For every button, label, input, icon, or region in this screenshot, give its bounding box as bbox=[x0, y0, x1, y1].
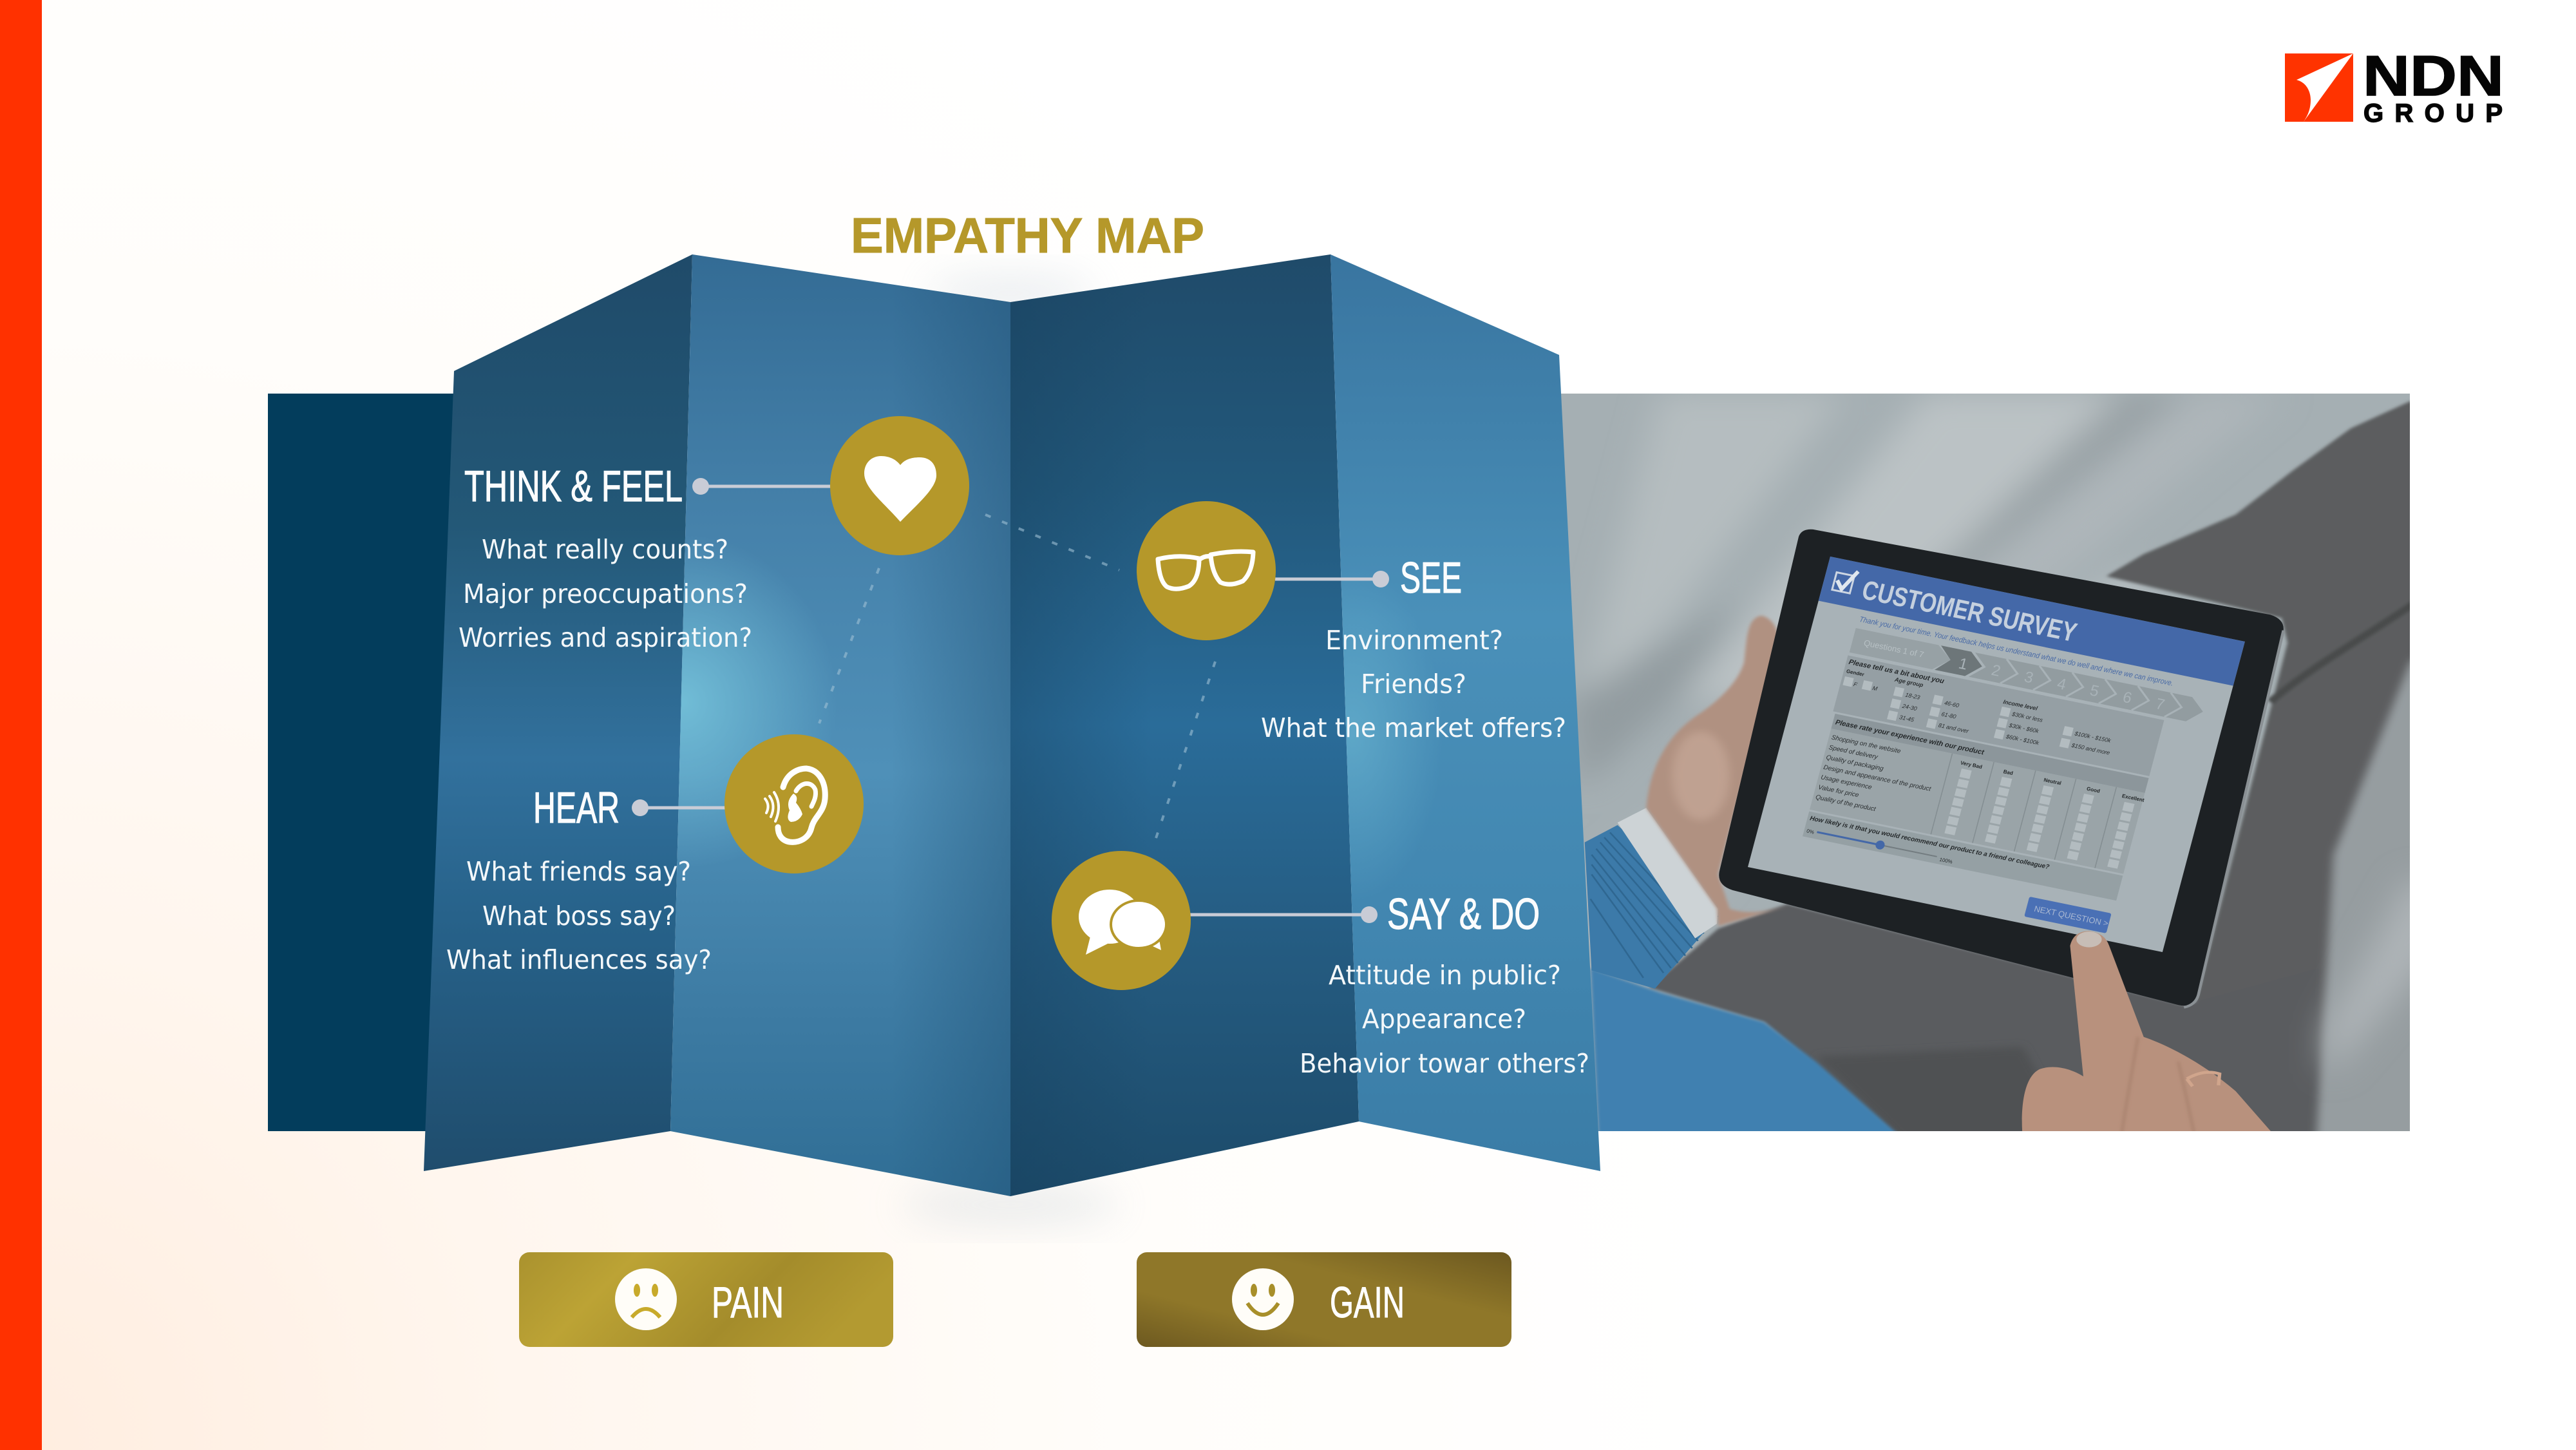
questions: What boss say? bbox=[482, 901, 676, 931]
tablet screen: 24-30 bbox=[1901, 703, 1918, 712]
tablet screen: Please tell us a bit about you bbox=[1848, 658, 1945, 685]
connector bbox=[1275, 571, 1389, 587]
tablet screen: 31-45 bbox=[1899, 714, 1915, 723]
pointing finger and hand bbox=[2022, 931, 2279, 1140]
panel: folded map bbox=[412, 245, 1616, 1205]
questions bbox=[1261, 625, 1566, 743]
sleeve bbox=[1591, 968, 1905, 1140]
tablet screen: 61-80 bbox=[1941, 711, 1957, 720]
questions: What influences say? bbox=[446, 944, 712, 975]
tablet screen bbox=[1748, 557, 2245, 952]
icon: ear bbox=[724, 734, 864, 873]
button: pain: PAIN bbox=[712, 1278, 784, 1327]
connector bbox=[692, 478, 837, 495]
tablet screen: 0% bbox=[1806, 828, 1815, 835]
questions bbox=[1300, 960, 1589, 1079]
survey button: NEXT QUESTION > bbox=[2033, 904, 2109, 928]
tablet screen: Design and appearance of the product bbox=[1823, 764, 1933, 793]
icon: sad face bbox=[615, 1268, 677, 1330]
tablet screen: 7 bbox=[2154, 695, 2166, 714]
holding hand bbox=[1646, 616, 1787, 926]
tablet screen: Gender bbox=[1846, 668, 1865, 678]
tablet screen: Thank you for your time. Your feedback helps us understand what we do well and where we can improve. bbox=[1859, 615, 2174, 688]
tablet screen: $150 and more bbox=[2070, 742, 2110, 756]
icon: glasses bbox=[1137, 501, 1276, 640]
tablet screen: $30k - $60k bbox=[2007, 722, 2040, 734]
tablet screen: Shopping on the website bbox=[1830, 734, 1902, 755]
survey button bbox=[2024, 897, 2112, 933]
tablet screen: 4 bbox=[2055, 675, 2068, 694]
questions: Attitude in public? bbox=[1329, 960, 1561, 991]
tablet screen: 5 bbox=[2088, 682, 2101, 700]
tablet screen: CUSTOMER SURVEY bbox=[1859, 575, 2080, 647]
button: pain bbox=[519, 1252, 893, 1347]
questions: Environment? bbox=[1325, 625, 1503, 656]
map fold 4 bbox=[1262, 245, 1616, 1179]
tablet screen: M bbox=[1871, 685, 1879, 692]
icon: happy face bbox=[1232, 1268, 1294, 1330]
section: hear bbox=[446, 734, 864, 975]
questions: Worries and aspiration? bbox=[459, 622, 752, 653]
tablet screen: Quality of packaging bbox=[1825, 754, 1884, 772]
tablet body bbox=[1719, 529, 2284, 1006]
photo: customer survey on tablet bbox=[1546, 386, 2443, 1140]
logo: NDN Group bbox=[2285, 44, 2504, 128]
questions: Major preoccupations? bbox=[463, 578, 748, 609]
tablet screen: 6 bbox=[2121, 689, 2134, 707]
button: gain bbox=[1137, 1252, 1511, 1347]
questions: What friends say? bbox=[466, 856, 691, 887]
logo: NDN Group: NDN bbox=[2363, 44, 2504, 108]
tablet screen: Income level bbox=[2003, 698, 2038, 712]
logo: NDN Group: GROUP bbox=[2363, 99, 2503, 128]
tablet screen: 3 bbox=[2022, 669, 2035, 687]
heading: SAY & DO bbox=[1387, 890, 1540, 939]
tablet screen: 46-60 bbox=[1944, 700, 1960, 709]
heading: SEE bbox=[1400, 553, 1462, 602]
questions: Friends? bbox=[1361, 669, 1466, 700]
heading: HEAR bbox=[533, 783, 620, 832]
questions: Behavior towar others? bbox=[1300, 1048, 1589, 1079]
tablet screen: $60k - $100k bbox=[2005, 733, 2040, 746]
tablet screen: Excellent bbox=[2121, 793, 2145, 803]
tablet screen: 2 bbox=[1989, 662, 2002, 680]
connector bbox=[632, 799, 734, 816]
tablet screen: Quality of the product bbox=[1815, 794, 1877, 813]
section: see bbox=[1137, 501, 1566, 743]
map fold 2 bbox=[528, 245, 1014, 1205]
red side bar bbox=[0, 0, 42, 1450]
icon: speech bubbles bbox=[1052, 851, 1191, 990]
dark backing rectangle bbox=[268, 394, 461, 1131]
tablet screen: Good bbox=[2086, 786, 2101, 794]
tablet screen: Please rate your experience with our product bbox=[1835, 719, 1985, 757]
questions bbox=[446, 856, 712, 975]
tablet screen: Questions 1 of 7 bbox=[1862, 638, 1925, 660]
tablet screen: 18-23 bbox=[1904, 692, 1920, 701]
questions: What really counts? bbox=[482, 534, 728, 565]
tablet screen: Age group bbox=[1893, 676, 1924, 689]
questions: Appearance? bbox=[1362, 1004, 1526, 1035]
section: think and feel bbox=[459, 416, 969, 653]
map fold 3 bbox=[1005, 245, 1372, 1205]
map fold 1 bbox=[412, 245, 702, 1179]
tablet screen: Value for price bbox=[1817, 784, 1860, 799]
tablet screen: F bbox=[1853, 681, 1858, 688]
section: say and do bbox=[1052, 851, 1589, 1079]
title: EMPATHY MAP bbox=[851, 208, 1204, 263]
tablet screen: Bad bbox=[2003, 768, 2014, 776]
icon: heart bbox=[830, 416, 969, 555]
tablet screen: 1 bbox=[1956, 655, 1969, 673]
tablet screen: Speed of delivery bbox=[1828, 744, 1879, 761]
tablet screen: Usage experience bbox=[1820, 774, 1873, 791]
questions bbox=[459, 534, 752, 653]
tablet screen: $30k or less bbox=[2011, 711, 2044, 723]
questions: What the market offers? bbox=[1261, 712, 1566, 743]
tablet screen: How likely is it that you would recommend our product to a friend or colleague? bbox=[1809, 815, 2050, 871]
tablet screen: 100% bbox=[1938, 857, 1953, 865]
soft shadows around folded map bbox=[901, 274, 1120, 1224]
tablet screen: Neutral bbox=[2043, 777, 2062, 786]
dotted connectors bbox=[819, 515, 1215, 844]
tablet screen: $100k - $150k bbox=[2073, 730, 2112, 744]
heading: THINK & FEEL bbox=[464, 462, 683, 511]
tablet screen: Very Bad bbox=[1960, 760, 1983, 770]
tablet screen: 81 and over bbox=[1938, 722, 1970, 734]
connector bbox=[1179, 906, 1378, 923]
button: gain: GAIN bbox=[1330, 1278, 1405, 1327]
